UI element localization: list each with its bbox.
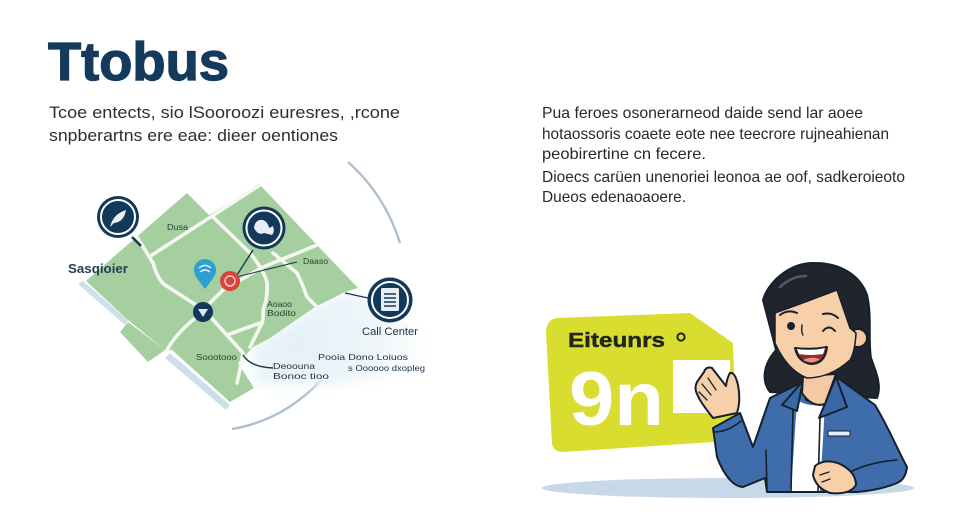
connector lines: [132, 237, 368, 368]
text block: left intro: [49, 103, 400, 145]
mouth: [795, 347, 827, 364]
icon: red marker: [220, 271, 240, 291]
icon: wifi pin: [194, 259, 216, 289]
hair: [763, 263, 879, 398]
hair highlight: [780, 276, 806, 287]
label: callout east: Pooia Dono Loiuos: [318, 352, 408, 362]
text block: right description: peobirertine cn fecere.: [542, 146, 706, 163]
green land: [86, 185, 358, 402]
panel: yellow SIM card: [546, 313, 736, 452]
water strips: [78, 281, 230, 410]
label: callout south: Deoouna: [273, 361, 315, 371]
card white block: [673, 360, 730, 413]
ear: [849, 329, 867, 347]
label: area south: Soootooo: [196, 353, 238, 362]
text block: left intro: Tcoe entects, sio lSooroozi euresres, ,rcone: [49, 103, 400, 122]
shirt: [791, 400, 825, 491]
icon: call center document badge: [368, 278, 412, 322]
label: callout east: s Oooooo dxopleg: [348, 363, 425, 373]
icon: junction marker: [193, 302, 213, 322]
label: callout south: Bonoc tioo: [273, 371, 329, 381]
arc: lower: [232, 378, 323, 429]
jacket collar: [782, 377, 847, 418]
pale coastal area: [250, 291, 425, 385]
label: area center: Bodito: [267, 309, 297, 318]
arc: upper right: [348, 162, 400, 243]
text block: right description: Pua feroes osonerarneod daide send lar aoee: [542, 105, 863, 122]
eyes and brows: [780, 311, 838, 335]
ground shadow: [542, 478, 914, 498]
text block: left intro: snpberartns ere eae: dieer oentiones: [49, 126, 338, 145]
roads: [137, 185, 317, 383]
jacket pocket tag: [828, 431, 850, 436]
label: area center: [267, 300, 297, 318]
label: callout east: [318, 352, 425, 373]
jacket folds: [714, 410, 897, 491]
label: area north: Dusa: [167, 223, 189, 232]
label: call center: Call Center: [362, 326, 418, 338]
text block: right description: Dioecs carüen unenoriei leonoa ae oof, sadkeroieoto: [542, 169, 905, 186]
text block: right description: [542, 105, 905, 206]
fist: [813, 461, 856, 493]
label: area east: Daaso: [303, 257, 329, 266]
text block: right description: hotaossoris coaete eote nee teecrore rujneahienan: [542, 126, 889, 143]
face: [775, 290, 856, 378]
neck: [802, 374, 836, 405]
icon: feather badge: [97, 196, 139, 238]
label: callout south: [273, 361, 329, 381]
illustration: smiling person: [696, 263, 907, 493]
panel: map: [68, 162, 425, 429]
icon: chat badge: [242, 206, 286, 250]
card number: 9n: [569, 357, 664, 442]
text block: right description: Dueos edenaoaoere.: [542, 189, 686, 206]
card ring icon: [677, 333, 685, 341]
waving hand: [696, 368, 739, 418]
label: area center: Aoaoo: [267, 300, 293, 309]
jacket: [713, 378, 907, 492]
label: supplier: Sasqioier: [68, 262, 128, 276]
title: Ttobus: [48, 32, 229, 92]
card heading: Eiteunrs: [568, 330, 665, 352]
